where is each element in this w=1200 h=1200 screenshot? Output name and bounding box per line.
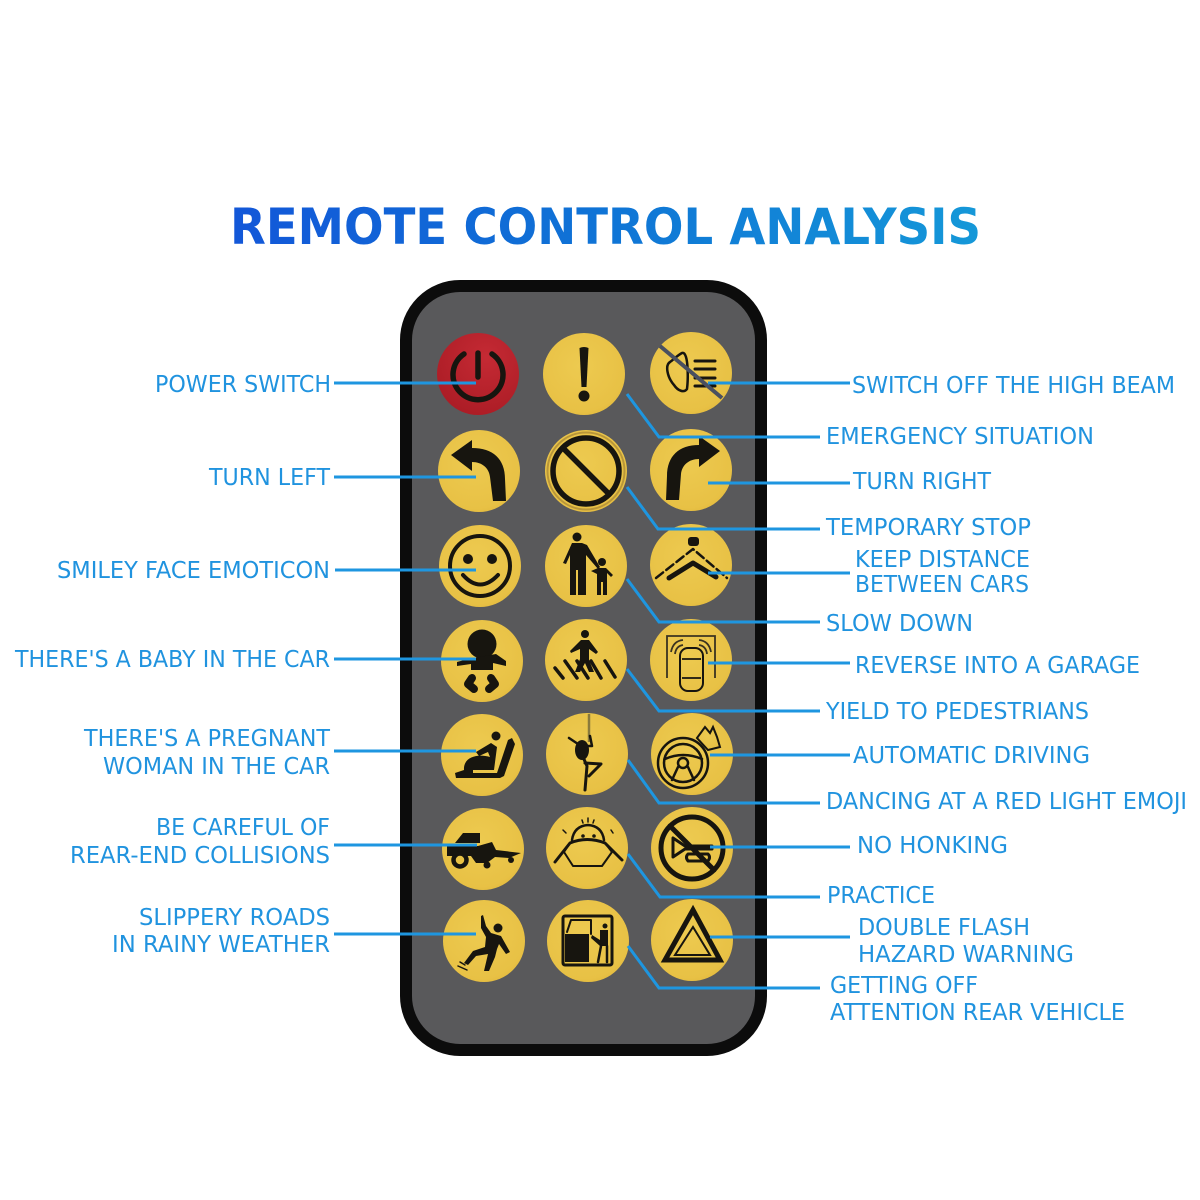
leader: power switch xyxy=(334,382,476,384)
label: turn left: TURN LEFT xyxy=(208,465,331,491)
button: pregnant xyxy=(441,714,523,796)
label: slippery roads: SLIPPERY ROADS xyxy=(139,905,330,931)
leader: double flash xyxy=(710,936,850,938)
label: keep distance: BETWEEN CARS xyxy=(855,572,1029,598)
label: double flash: DOUBLE FLASH xyxy=(858,915,1030,941)
label: slippery roads: IN RAINY WEATHER xyxy=(112,932,330,958)
label: turn right: TURN RIGHT xyxy=(852,469,992,495)
label: baby in the car: THERE'S A BABY IN THE CAR xyxy=(14,647,330,673)
button: practice learner xyxy=(546,807,628,889)
leader: automatic driving xyxy=(710,754,850,756)
button: keep distance xyxy=(650,524,732,606)
label: getting off xyxy=(830,973,1125,1026)
leader: slow down xyxy=(627,579,820,622)
leader: keep distance xyxy=(708,572,850,574)
leader: pregnant xyxy=(334,750,476,752)
label: slow down: SLOW DOWN xyxy=(826,611,973,637)
label: pregnant woman: WOMAN IN THE CAR xyxy=(103,754,330,780)
label: keep distance xyxy=(855,547,1030,598)
label: emergency situation: EMERGENCY SITUATION xyxy=(826,424,1094,450)
leader: dancing xyxy=(628,760,820,803)
label: reverse into garage: REVERSE INTO A GARAGE xyxy=(855,653,1140,679)
button: smiley xyxy=(439,525,521,607)
button: automatic driving xyxy=(651,713,733,795)
leader: yield xyxy=(627,669,820,711)
leader: turn right xyxy=(708,482,850,484)
leader: slippery xyxy=(334,932,476,936)
label: getting off: GETTING OFF xyxy=(830,973,978,999)
label: getting off: ATTENTION REAR VEHICLE xyxy=(830,1000,1125,1026)
leader: reverse xyxy=(708,662,850,664)
leader: getting off xyxy=(628,946,820,988)
label: slippery roads xyxy=(112,905,330,958)
label: yield to pedestrians: YIELD TO PEDESTRIANS xyxy=(825,699,1089,725)
leader: practice xyxy=(628,854,820,897)
button: pole dancer xyxy=(546,713,628,795)
leader: rear-end xyxy=(334,844,477,846)
label: power switch: POWER SWITCH xyxy=(155,372,331,398)
button: pedestrian crossing xyxy=(545,619,627,701)
label: automatic driving: AUTOMATIC DRIVING xyxy=(853,743,1090,769)
button: no entry stop xyxy=(545,430,627,512)
button: baby xyxy=(441,620,523,702)
leader: smiley xyxy=(335,568,476,572)
label: pregnant woman xyxy=(83,726,331,780)
button: getting off door xyxy=(547,900,629,982)
label: practice: PRACTICE xyxy=(827,883,935,909)
button: power xyxy=(437,333,519,415)
leader: emergency xyxy=(627,394,820,437)
label: no honking: NO HONKING xyxy=(857,833,1008,859)
button: slippery xyxy=(443,900,525,982)
leader: no honking xyxy=(710,846,850,848)
label: rear-end collisions xyxy=(70,815,330,869)
label: rear-end collisions: REAR-END COLLISIONS xyxy=(70,843,330,869)
button: rear-end collision xyxy=(442,808,524,890)
label: smiley face emoticon: SMILEY FACE EMOTICON xyxy=(57,558,330,584)
button: high beam off xyxy=(650,332,732,414)
leader: turn left xyxy=(334,476,476,478)
button: emergency xyxy=(543,333,625,415)
button: adult and child xyxy=(545,525,627,607)
title: REMOTE CONTROL ANALYSIS xyxy=(230,198,981,256)
leader: temporary stop xyxy=(627,487,820,529)
button: hazard triangle xyxy=(651,899,733,981)
label: pregnant woman: THERE'S A PREGNANT xyxy=(83,726,331,752)
label: rear-end collisions: BE CAREFUL OF xyxy=(156,815,330,841)
label: high beam: SWITCH OFF THE HIGH BEAM xyxy=(852,373,1175,399)
button: turn left xyxy=(438,430,520,512)
remote control body xyxy=(406,286,761,1050)
label: dancing emoji: DANCING AT A RED LIGHT EMOJI xyxy=(826,789,1187,815)
leader: baby xyxy=(334,658,476,660)
label: double flash xyxy=(858,915,1074,968)
leader: high beam xyxy=(708,382,850,384)
label: double flash: HAZARD WARNING xyxy=(858,942,1074,968)
button: turn right xyxy=(650,429,732,511)
button: no honking xyxy=(651,807,733,889)
button: reverse into garage xyxy=(650,619,732,701)
label: temporary stop: TEMPORARY STOP xyxy=(825,515,1031,541)
label: keep distance: KEEP DISTANCE xyxy=(855,547,1030,573)
